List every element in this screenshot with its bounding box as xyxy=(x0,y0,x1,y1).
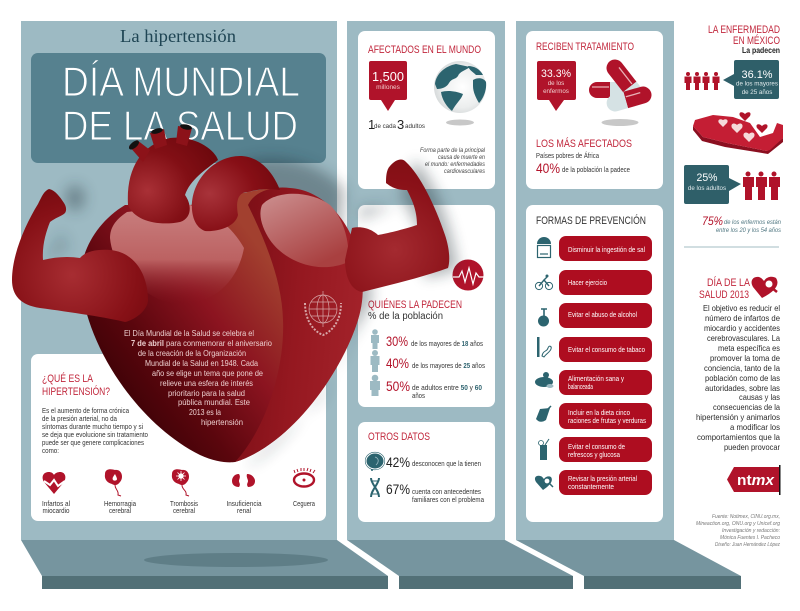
heading: formas: FORMAS DE PREVENCIÓN xyxy=(536,214,646,227)
text: países pobres: Países pobres de África xyxy=(536,151,600,160)
text: sources: Investigación y redacción: xyxy=(722,528,780,534)
heading: los más afectados: LOS MÁS AFECTADOS xyxy=(536,137,632,150)
text: sources: Mónica Fuentes I. Pacheco xyxy=(720,535,781,541)
label: trombosis: cerebral xyxy=(173,506,195,515)
panel: otros datos xyxy=(358,422,495,522)
stat: 50%: 50% xyxy=(386,378,410,394)
stat: 42%: desconocen que la tienen xyxy=(412,459,481,468)
aorta xyxy=(128,138,218,223)
item: alimentación xyxy=(535,370,652,395)
text: causa de muerte: cardiovasculares xyxy=(444,168,486,175)
icon: heart with magnifier xyxy=(752,277,777,298)
title banner: DÍA MUNDIAL xyxy=(62,58,300,105)
callout: 1,500 millones: 1,500 xyxy=(372,69,404,84)
stat: 75% xyxy=(702,214,782,234)
heading: La hipertensión: La hipertensión xyxy=(120,26,236,46)
label: insuficiencia renal xyxy=(226,499,262,515)
text: día mundial description: El Día Mundial de la Salud se celebra el xyxy=(124,329,254,338)
label: trombosis xyxy=(170,499,198,515)
text: objetivo: consecuencias de la xyxy=(713,402,780,412)
icon: infarto xyxy=(43,472,65,494)
callout: 25%: 25% xyxy=(696,172,718,184)
callout: 36.1% xyxy=(723,60,779,99)
stat: 50% xyxy=(370,375,482,400)
panel: afectados en el mundo xyxy=(358,31,495,189)
stat: 40% África: 40% xyxy=(536,160,560,176)
item: presión xyxy=(535,470,652,495)
stat: 67% xyxy=(386,481,485,504)
text: definition: Es el aumento de forma crónica xyxy=(42,406,130,415)
text: objetivo: conciencia, tanto de la xyxy=(704,363,780,373)
text: objetivo: población como de las xyxy=(705,373,780,383)
item: frutas xyxy=(536,403,652,429)
item: alcohol: Evitar el abuso de alcohol xyxy=(568,310,637,319)
globe shadow xyxy=(446,120,474,126)
heading: la enfermedad en méxico: La padecen xyxy=(742,46,780,55)
item: ejercicio: Hacer ejercicio xyxy=(568,278,607,287)
stat: 1 de cada 3 adultos: adultos xyxy=(405,123,426,130)
icon: four people xyxy=(684,72,720,90)
stat: 30% xyxy=(371,329,483,349)
label: hemorragia: Hemorragia xyxy=(104,499,137,508)
map hearts xyxy=(718,119,755,142)
heading: qué es la hipertensión: HIPERTENSIÓN? xyxy=(42,385,110,398)
stat: 40% xyxy=(370,350,485,372)
panel: qué es la hipertensión xyxy=(31,354,326,521)
callout: 33.3%: de los xyxy=(548,80,564,87)
item: presión: constantemente xyxy=(568,482,614,491)
callout: 1,500 millones: millones xyxy=(376,84,401,91)
text: día mundial description: prioritario para la salud xyxy=(168,389,245,398)
text: sources: Mineaction.org, ONU.org y Unicef.org xyxy=(696,521,781,527)
callout: 25%: de los adultos xyxy=(688,185,726,192)
text: sources: Fuente: Notimex, CINU.org.mx, xyxy=(712,514,780,520)
heading: día de la salud 2013: SALUD 2013 xyxy=(699,289,749,301)
item: tabaco: Evitar el consumo de tabaco xyxy=(568,345,645,354)
item: presión: Revisar la presión arterial xyxy=(568,474,637,483)
icon: dna xyxy=(371,478,379,497)
heading: afectados: AFECTADOS EN EL MUNDO xyxy=(368,44,481,56)
heart body xyxy=(81,188,362,462)
text: causa de muerte xyxy=(420,147,486,175)
panel: right background xyxy=(516,21,674,540)
text: causa de muerte: causa de muerte en xyxy=(438,154,485,161)
stat: 50%: de adultos entre 50 y 60 xyxy=(412,383,482,392)
title banner xyxy=(31,53,326,163)
callout: 33.3%: enfermos xyxy=(543,88,569,95)
icon: head xyxy=(365,452,385,471)
stat: 1 de cada 3 adultos xyxy=(368,117,426,132)
icon: ojo xyxy=(294,468,315,486)
text: día mundial description xyxy=(124,329,273,427)
heart right lobe xyxy=(235,188,363,462)
icon: WHO emblem xyxy=(305,291,341,335)
left arm xyxy=(12,189,148,322)
right arm xyxy=(345,159,449,292)
callout: 33.3%: 33.3% xyxy=(541,68,571,80)
highlight left xyxy=(110,205,244,304)
callout: 33.3% xyxy=(537,61,576,111)
heading: qué es la hipertensión xyxy=(42,372,110,398)
label: infartos xyxy=(42,499,70,515)
text: definition: puede ser que genere complicaciones xyxy=(42,438,144,447)
stat: 42%: 42% xyxy=(386,454,410,470)
icon: hemorragia cerebral xyxy=(105,469,122,496)
text: objetivo: comportamientos que la xyxy=(697,432,780,442)
text: objetivo: hipertensión y animarlos xyxy=(696,412,780,422)
text: día mundial description: relieve una esfera de interés xyxy=(160,379,253,388)
text: objetivo: causas y las xyxy=(739,392,780,402)
stat: 75%: entre los 20 y los 54 años xyxy=(716,227,782,234)
stat: 30%: de los mayores de 18 años xyxy=(411,339,483,348)
text: objetivo: meta específica es xyxy=(718,343,780,353)
stat: 30%: 30% xyxy=(386,333,408,349)
text: objetivo: cerebrovasculares. La xyxy=(707,333,780,343)
logo: ntmx xyxy=(727,465,780,495)
text: definition: de la presión arterial, no da xyxy=(42,414,118,423)
stat: 75%: de los enfermos están xyxy=(724,219,781,226)
heading: la enfermedad en méxico xyxy=(708,24,780,55)
label: insuficiencia renal: Insuficiencia xyxy=(226,499,262,508)
map: México xyxy=(693,112,783,154)
stat: 67%: familiares con el problema xyxy=(412,495,485,504)
text: día mundial description: pública mundial. Este xyxy=(178,398,251,407)
item: tabaco xyxy=(537,337,652,362)
text: causa de muerte: Forma parte de la principal xyxy=(420,147,485,154)
text: definition: síntomas durante mucho tiempo y si xyxy=(42,422,143,431)
panel: left background xyxy=(21,21,337,540)
text: sources: Diseño: Juan Hernández López xyxy=(715,542,780,548)
icon: trombosis cerebral xyxy=(172,469,189,496)
vessel tubes xyxy=(127,123,192,162)
panel: middle background xyxy=(347,21,505,540)
icon: globe xyxy=(434,61,486,113)
label: trombosis: Trombosis xyxy=(170,499,198,508)
callout: 36.1%: de los mayores xyxy=(736,80,778,88)
text: día mundial description: de la creación de la Organización xyxy=(138,349,246,358)
heading: quiénes: QUIÉNES LA PADECEN xyxy=(368,298,462,311)
label: hemorragia xyxy=(104,499,137,515)
callout: 36.1%: 36.1% xyxy=(742,69,773,81)
panel: reciben tratamiento xyxy=(526,31,663,189)
stat: 40%: 40% xyxy=(386,355,409,371)
item: alcohol xyxy=(538,303,652,328)
panel: formas de prevención xyxy=(526,205,663,522)
item: sal: Disminuir la ingestión de sal xyxy=(568,245,645,254)
text: objetivo: número de infartos de xyxy=(705,313,780,323)
base: pedestal of right panel xyxy=(516,540,741,589)
callout: 1,500 millones xyxy=(369,61,407,111)
label: ceguera: Ceguera xyxy=(293,499,316,508)
stat: 75%: 75% xyxy=(702,214,723,228)
subheading: % de la población: % de la población xyxy=(368,311,443,322)
text: objetivo: miocardio y accidentes xyxy=(704,323,780,333)
text: día mundial description: 7 de abril para conmemorar el aniversario xyxy=(131,339,273,348)
stat: 1 de cada 3 adultos: 1 xyxy=(368,117,375,132)
text: objetivo: pueden provocar xyxy=(724,442,780,452)
item: frutas: raciones de frutas y verduras xyxy=(568,416,646,425)
item: refrescos: Evitar el consumo de xyxy=(568,442,625,451)
stat: 1 de cada 3 adultos: 3 xyxy=(397,117,404,132)
text: definition: como: xyxy=(42,446,59,455)
panel: quiénes la padecen xyxy=(358,205,495,407)
item: alimentación: balanceada xyxy=(568,382,594,391)
text: causa de muerte: el mundo: enfermedades xyxy=(425,161,486,168)
stat: 40%: de los mayores de 25 años xyxy=(412,361,485,370)
heading: reciben: RECIBEN TRATAMIENTO xyxy=(536,41,634,53)
text: objetivo: El objetivo es reducir el xyxy=(703,303,780,313)
item: sal xyxy=(537,236,652,261)
title banner: DE LA SALUD xyxy=(62,102,298,149)
logo: ntmx: ntmx xyxy=(737,472,775,489)
label: infartos: Infartos al xyxy=(42,499,70,508)
text: día mundial description: Mundial de la Salud en 1948. Cada xyxy=(145,359,258,368)
base: pedestal of middle panel xyxy=(347,540,573,589)
heading: la enfermedad en méxico: EN MÉXICO xyxy=(733,34,780,47)
heading: qué es la hipertensión: ¿QUÉ ES LA xyxy=(42,372,94,385)
text: día mundial description: año se elige un tema que pone de xyxy=(152,369,264,378)
stat: 1 de cada 3 adultos: de cada xyxy=(374,123,396,130)
heart drop shadow xyxy=(42,158,458,468)
item: refrescos xyxy=(538,437,652,462)
text: día mundial description: 2013 es la xyxy=(189,408,221,417)
stat: 40% África xyxy=(536,160,630,176)
item: ejercicio xyxy=(535,270,652,295)
callout: 25% xyxy=(684,165,741,204)
heading: la enfermedad en méxico: LA ENFERMEDAD xyxy=(708,24,780,36)
text: objetivo: promover la toma de xyxy=(710,353,780,363)
text: día mundial description: hipertensión xyxy=(201,418,243,427)
heading: día de la salud 2013 xyxy=(699,276,751,301)
heading: otros datos: OTROS DATOS xyxy=(368,431,430,443)
stat: 40% África: de la población la padece xyxy=(562,165,630,174)
item: refrescos: refrescos y glucosa xyxy=(568,450,621,459)
label: infartos: miocardio xyxy=(42,506,70,515)
callout: 36.1%: de 25 años xyxy=(742,89,772,96)
icon: riñones xyxy=(232,474,255,487)
pulmonary arch xyxy=(192,156,280,231)
item: frutas: Incluir en la dieta cinco xyxy=(568,408,630,417)
text: objetivo: autoridades, sobre las xyxy=(705,383,780,393)
text: objetivo xyxy=(696,303,780,452)
text: definition: se deja que evolucione sin tratamiento xyxy=(42,430,148,439)
item: alimentación: Alimentación sana y xyxy=(568,374,624,383)
icon: pills xyxy=(589,56,654,114)
label: insuficiencia renal: renal xyxy=(237,506,251,515)
icon: pulse xyxy=(452,260,484,290)
heading: día de la salud 2013: DÍA DE LA xyxy=(707,276,751,289)
stat: 67%: cuenta con antecedentes xyxy=(412,487,481,496)
base: pedestal of left panel xyxy=(21,540,388,589)
text: definition xyxy=(42,406,148,455)
text: sources xyxy=(696,514,781,548)
pills shadow xyxy=(602,119,638,126)
stat: 50%: años xyxy=(412,391,425,400)
stat: 67%: 67% xyxy=(386,481,410,497)
highlight right xyxy=(260,194,348,267)
illustration: heart with arms xyxy=(12,123,449,462)
stat: 42% xyxy=(386,454,481,470)
icon: three people xyxy=(743,172,780,200)
label: hemorragia: cerebral xyxy=(109,506,131,515)
text: objetivo: a modificar los xyxy=(730,422,780,432)
